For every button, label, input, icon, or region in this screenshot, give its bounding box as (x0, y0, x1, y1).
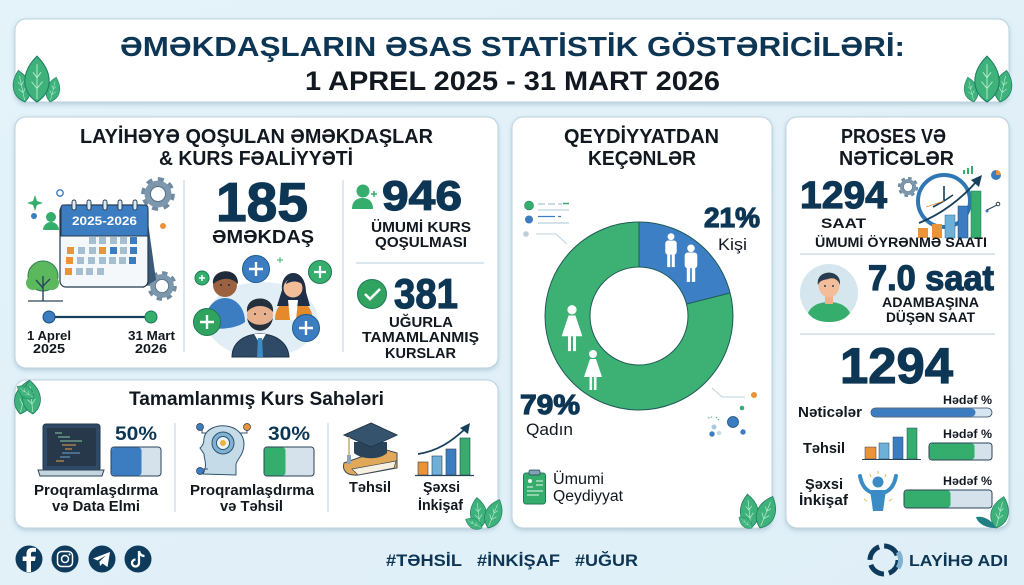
panel heading: Tamamlanmış Kurs Sahələri (129, 389, 384, 410)
icon: leaves left (10, 56, 63, 104)
stat: 7.0 hours per person: 7.0 saat (868, 259, 994, 298)
panel heading: QEYDİYYATDAN (564, 125, 719, 148)
panel heading: KEÇƏNLƏR (588, 148, 697, 170)
stat: 7.0 hours per person: ADAMBAŞINA (882, 295, 979, 310)
label (34, 482, 159, 515)
decorative dots bottom right (708, 388, 757, 437)
title line 2: 1 APREL 2025 - 31 MART 2026 (305, 66, 720, 96)
panel heading: PROSES VƏ (841, 126, 946, 148)
label: Ümumi (553, 470, 604, 488)
panel: process and results (786, 117, 1012, 530)
panel: course activity (15, 117, 498, 368)
label: Təhsil (349, 479, 391, 496)
icon: men (665, 233, 697, 282)
panel heading: & KURS FƏALİYYƏTİ (159, 147, 353, 170)
row: results progress: Nəticələr (798, 404, 862, 421)
stat: 79 percent women (520, 389, 580, 439)
icon: tiktok (124, 546, 152, 572)
footer hashtags (386, 551, 638, 570)
label: Qeydiyyat (553, 488, 624, 505)
timeline: 31 Mart (128, 328, 176, 343)
stat: 7.0 hours per person (868, 259, 994, 325)
stat: 21 percent men (704, 202, 760, 254)
stat: 185 employees: ƏMƏKDAŞ (212, 227, 314, 247)
icon: avatar (800, 264, 858, 322)
icon: calendar illustration: 2025-2026 (72, 216, 137, 228)
footer hashtags: #UĞUR (575, 551, 638, 570)
stat: 381 completed: 381 (394, 270, 458, 317)
stat: 30 percent (264, 424, 314, 476)
stat: 79 percent women: Qadın (526, 420, 573, 439)
icon: leaves top left (11, 379, 42, 416)
timeline: 1 Aprel (27, 328, 71, 343)
stat: 7.0 hours per person: DÜŞƏN SAAT (886, 310, 976, 325)
row: personal development progress: Hədəf % (943, 474, 992, 488)
icon: calendar illustration (26, 180, 174, 301)
row: personal development progress: İnkişaf (799, 492, 849, 509)
timeline (27, 311, 176, 356)
row: education progress: Hədəf % (943, 427, 992, 441)
icon: clipboard (524, 470, 546, 504)
stat: 79 percent women: 79% (520, 389, 580, 420)
label: Şəxsi (423, 479, 460, 496)
label: İnkişaf (418, 497, 464, 514)
stat: 1294 hours: 1294 (800, 175, 887, 217)
footer logo (870, 546, 1008, 574)
stat: 30 percent: 30% (268, 424, 310, 445)
stat: 946 enrolments: 946 (382, 172, 462, 219)
footer hashtags: #İNKİŞAF (477, 551, 560, 570)
stat: 381 completed (358, 270, 479, 362)
label (418, 479, 464, 514)
icon: leaves bottom right (736, 493, 781, 531)
icon: instagram (52, 546, 78, 572)
icon: team illustration (194, 256, 332, 358)
row: results progress: Hədəf % (943, 393, 992, 407)
panel heading (839, 126, 955, 170)
stat: 21 percent men: Kişi (718, 235, 747, 254)
stat: 1294 hours: SAAT (821, 215, 867, 231)
icon: clock with growth chart (900, 166, 1001, 238)
chart: donut (545, 222, 733, 410)
title line 1: ƏMƏKDAŞLARIN ƏSAS STATİSTİK GÖSTƏRİCİLƏRİ: (120, 31, 905, 62)
stat: 50 percent (111, 424, 161, 476)
timeline: 2025 (33, 341, 65, 356)
panel heading (564, 125, 719, 170)
stat: 946 enrolments: ÜMUMİ KURS (371, 219, 471, 236)
label: Proqramlaşdırma (34, 482, 159, 499)
panel heading: NƏTİCƏLƏR (839, 147, 955, 170)
icon: women (562, 305, 602, 390)
icon: laptop (38, 424, 104, 476)
stat: 21 percent men: 21% (704, 202, 760, 233)
label: və Təhsil (220, 498, 283, 515)
label: ÜMUMİ ÖYRƏNMƏ SAATI (815, 235, 987, 250)
footer social icons (16, 546, 152, 572)
decorative legend top left (523, 201, 569, 244)
label: və Data Elmi (52, 498, 140, 515)
panel: completed course areas (11, 379, 507, 532)
stat: 946 enrolments: QOŞULMASI (375, 234, 467, 251)
icon: leaves right (961, 56, 1015, 104)
icon: telegram (88, 546, 116, 572)
chart: growth bars (415, 423, 474, 476)
icon: leaves bottom right (463, 497, 507, 532)
footer logo: LAYİHƏ ADI (909, 552, 1008, 570)
stat: 1294 results: 1294 (840, 338, 953, 394)
panel: registrations (512, 117, 781, 531)
row: personal development progress: Şəxsi (805, 476, 843, 493)
row: education progress: Təhsil (803, 440, 845, 457)
row: results progress (798, 393, 992, 421)
label (553, 470, 624, 505)
label (190, 482, 315, 515)
stat: 381 completed: UĞURLA (389, 313, 453, 331)
row: personal development progress (799, 471, 992, 511)
icon: facebook (16, 546, 42, 572)
footer hashtags: #TƏHSİL (386, 551, 462, 570)
stat: 381 completed: KURSLAR (385, 345, 456, 362)
stat: 946 enrolments (352, 172, 471, 251)
panel heading (80, 125, 434, 170)
label: Proqramlaşdırma (190, 482, 315, 499)
stat: 381 completed: TAMAMLANMIŞ (362, 329, 479, 346)
icon: leaves bottom right (976, 495, 1012, 530)
panel heading: LAYİHƏYƏ QOŞULAN ƏMƏKDAŞLAR (80, 125, 434, 148)
header banner (10, 19, 1015, 104)
stat: 185 employees: 185 (216, 171, 308, 233)
icon: graduation cap on books (344, 423, 397, 475)
stat: 50 percent: 50% (115, 424, 157, 445)
icon: head with gear (196, 424, 250, 475)
row: education progress (803, 427, 992, 460)
timeline: 2026 (135, 341, 167, 356)
